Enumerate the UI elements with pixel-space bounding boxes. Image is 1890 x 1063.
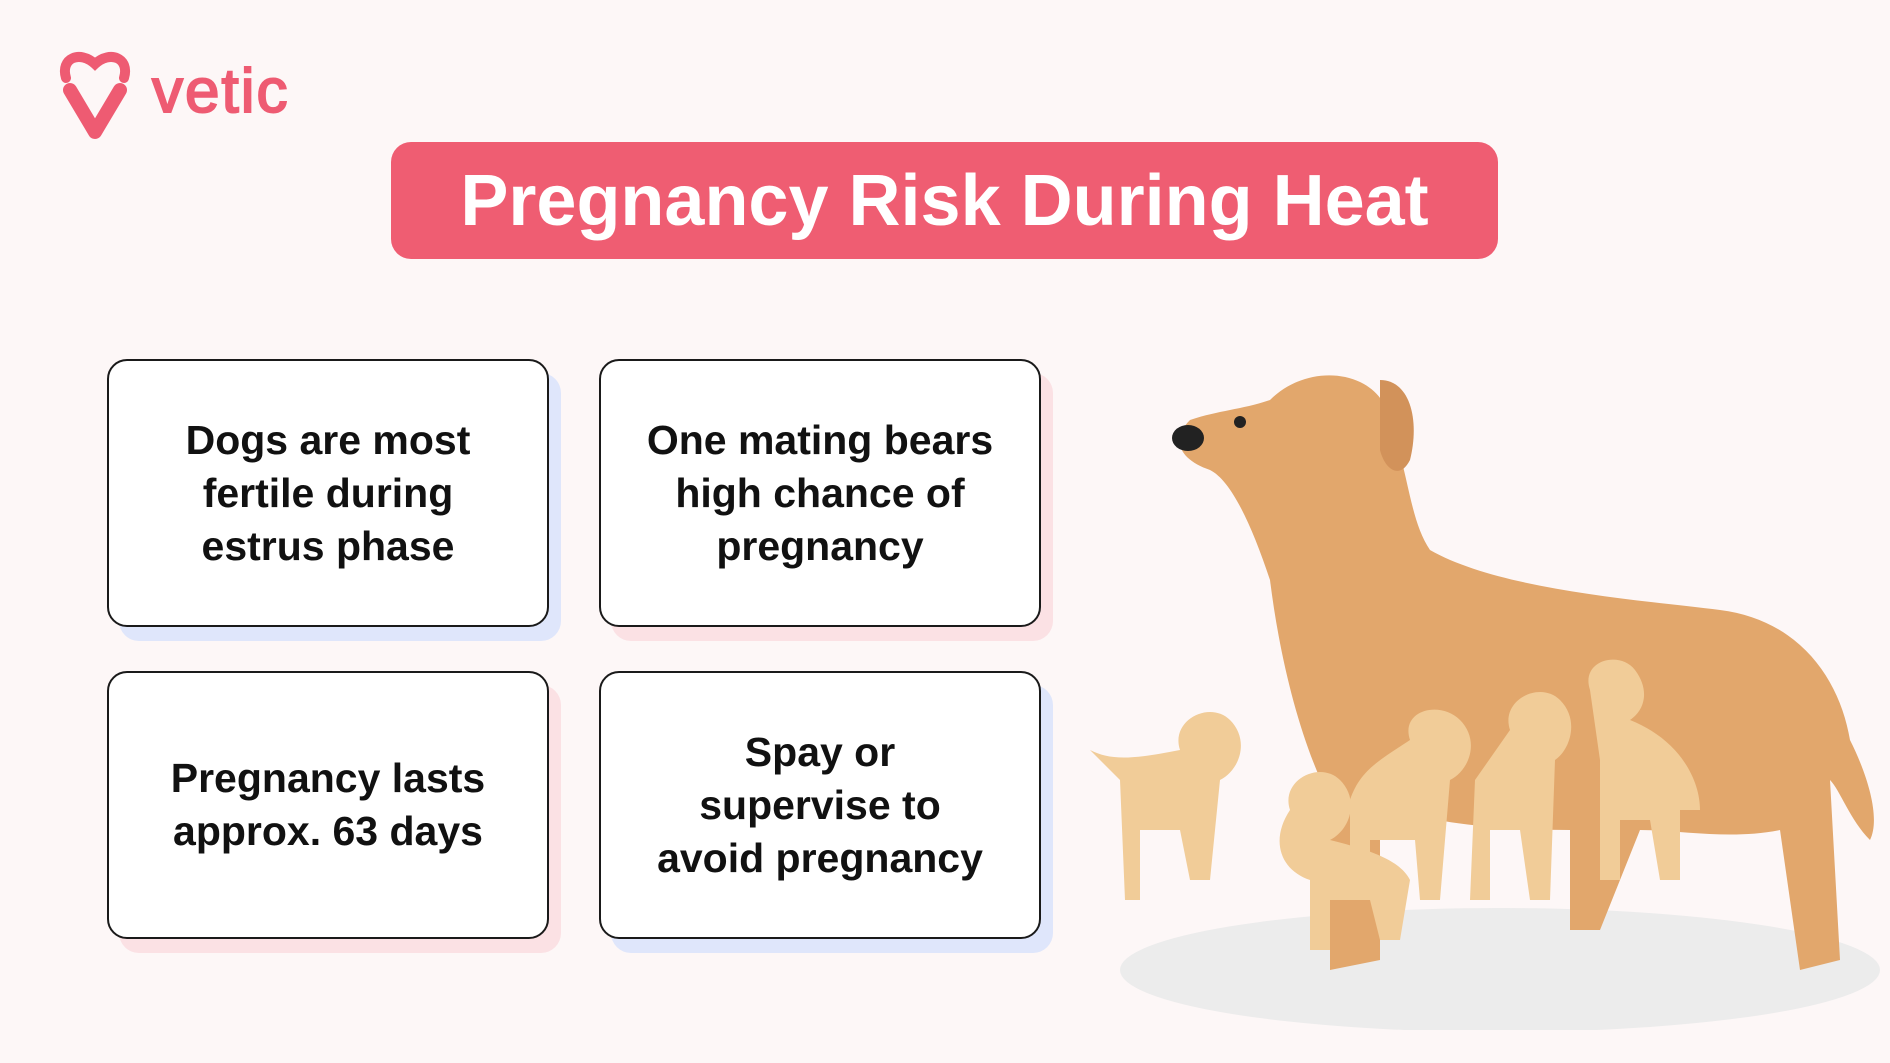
card 4 [599,671,1041,939]
icon: heart v [60,52,130,139]
card 2 [599,359,1041,627]
card 2: high chance of [675,470,965,516]
card 1: estrus phase [202,522,454,568]
illustration: dog with puppies [1090,375,1880,1030]
card 3: Pregnancy lasts [171,755,485,801]
card 2: One mating bears [647,416,993,462]
puppies [1090,660,1700,950]
logo [60,52,289,139]
card 1: fertile during [203,470,453,516]
card 1 [107,359,549,627]
card 1: Dogs are most [186,416,470,462]
mother dog [1180,375,1874,970]
card 4: avoid pregnancy [657,834,983,880]
card 4: Spay or [745,728,895,774]
logo text: vetic [152,57,289,126]
title [391,142,1498,259]
card 4: supervise to [699,782,941,828]
title: Pregnancy Risk During Heat [460,160,1429,240]
card 3: approx. 63 days [173,808,483,854]
card 2: pregnancy [716,522,924,568]
card 3 [107,671,549,939]
